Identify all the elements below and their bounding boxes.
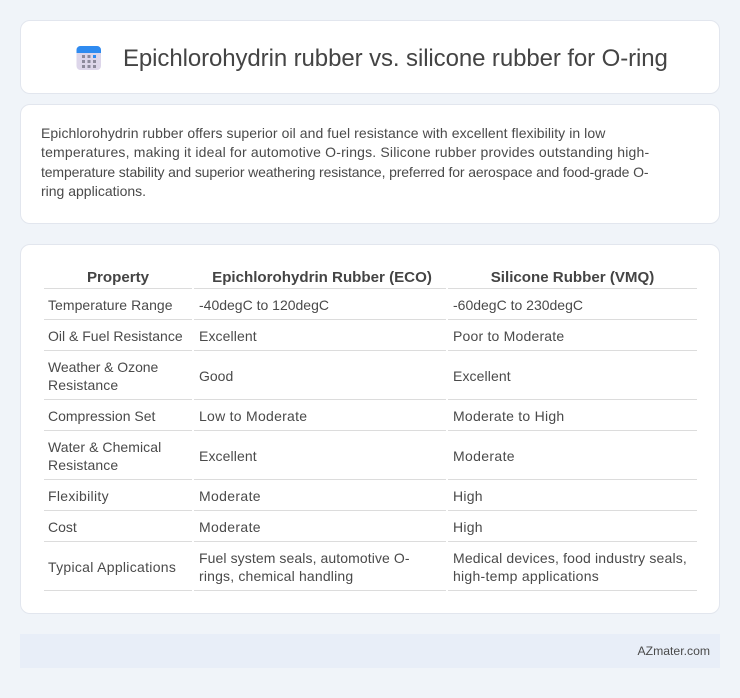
- comparison table: Oil & Fuel Resistance: [48, 328, 183, 344]
- comparison table: Good: [199, 368, 233, 384]
- comparison table: Compression Set: [48, 408, 155, 424]
- summary text: temperatures, making it ideal for automotive O-rings. Silicone rubber provides outstanding high-: [41, 144, 649, 160]
- comparison table: Moderate: [199, 519, 261, 535]
- summary text: [41, 125, 649, 199]
- summary text: temperature stability and superior weathering resistance, preferred for aerospace and food-grade O-: [41, 164, 648, 180]
- table header: [44, 269, 697, 289]
- comparison table: Cost: [48, 519, 77, 535]
- comparison table: Water & Chemical: [48, 439, 161, 455]
- table header: Property: [87, 269, 149, 286]
- comparison table: Low to Moderate: [199, 408, 307, 424]
- comparison table: -40degC to 120degC: [199, 297, 329, 313]
- footer credit: AZmater.com: [638, 644, 710, 658]
- table header: Silicone Rubber (VMQ): [491, 269, 654, 286]
- table header: Epichlorohydrin Rubber (ECO): [212, 269, 432, 286]
- footer: [20, 634, 720, 668]
- comparison table: Moderate: [199, 488, 261, 504]
- comparison table: Moderate: [453, 448, 515, 464]
- comparison table: Excellent: [453, 368, 511, 384]
- comparison table: Weather & Ozone: [48, 359, 158, 375]
- comparison table: Resistance: [48, 377, 118, 393]
- comparison table: Excellent: [199, 448, 257, 464]
- comparison table: Fuel system seals, automotive O-: [199, 550, 410, 566]
- comparison table: Moderate to High: [453, 408, 564, 424]
- panel: comparison table: [20, 244, 720, 614]
- title: Epichlorohydrin rubber vs. silicone rubber for O-ring: [123, 45, 668, 72]
- panel: summary: [20, 104, 720, 224]
- panel: title card: [20, 20, 720, 94]
- comparison table: Resistance: [48, 457, 118, 473]
- comparison table: High: [453, 488, 483, 504]
- summary text: ring applications.: [41, 183, 146, 199]
- comparison table: Medical devices, food industry seals,: [453, 550, 687, 566]
- summary text: Epichlorohydrin rubber offers superior oil and fuel resistance with excellent flexibility in low: [41, 125, 605, 141]
- comparison table: Flexibility: [48, 488, 109, 504]
- comparison table: High: [453, 519, 483, 535]
- comparison table: -60degC to 230degC: [453, 297, 583, 313]
- comparison table: rings, chemical handling: [199, 568, 353, 584]
- comparison table: Temperature Range: [48, 297, 173, 313]
- icon: calendar: [76, 46, 101, 70]
- comparison table: Typical Applications: [48, 559, 176, 575]
- comparison table: high-temp applications: [453, 568, 599, 584]
- comparison table: Excellent: [199, 328, 257, 344]
- comparison table: Poor to Moderate: [453, 328, 564, 344]
